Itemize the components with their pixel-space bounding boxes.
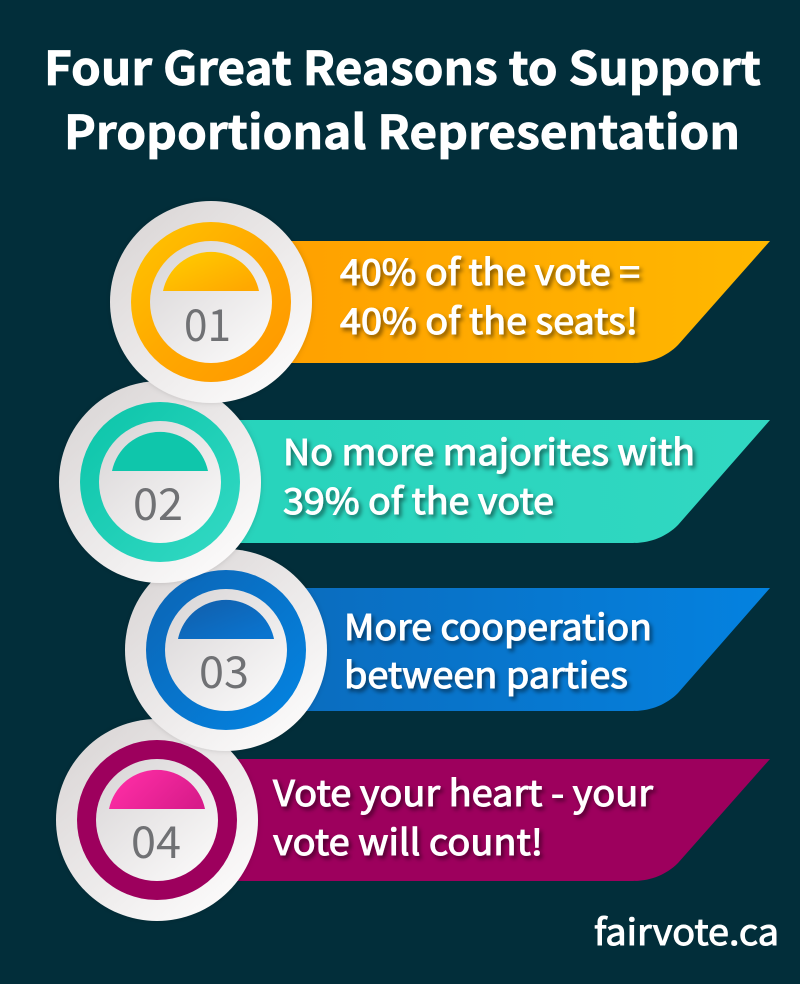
banner 2: teal: 39% of the vote — [283, 474, 554, 525]
banner 3: blue: between parties — [344, 648, 628, 699]
badge 03 — [125, 549, 327, 751]
website: fairvote.ca — [594, 905, 779, 956]
half disc 01 — [163, 252, 259, 291]
banner 4: magenta — [200, 759, 770, 881]
banner 3: blue — [260, 588, 770, 711]
banner 1: orange — [250, 241, 770, 363]
badge 04 — [56, 719, 258, 921]
banner 1: orange: 40% of the vote = — [340, 245, 640, 296]
banner 4: magenta: vote will count! — [273, 815, 543, 866]
title: Proportional Representation — [64, 96, 740, 163]
badge 02 — [59, 381, 261, 583]
banner 2: teal: No more majorites with — [283, 425, 695, 476]
banner 2: teal — [200, 420, 770, 543]
title — [44, 32, 761, 163]
half disc 03 — [178, 600, 274, 639]
number 02: 02 — [133, 469, 183, 533]
number 03: 03 — [199, 637, 249, 701]
banner 4: magenta: Vote your heart - your — [273, 766, 653, 817]
half disc 04 — [109, 770, 205, 809]
title: Four Great Reasons to Support — [44, 32, 761, 99]
half disc 02 — [112, 432, 208, 471]
number 01: 01 — [184, 290, 231, 354]
number 04: 04 — [131, 807, 181, 871]
badge 01 — [110, 201, 312, 403]
banner 3: blue: More cooperation — [344, 600, 652, 651]
banner 1: orange: 40% of the seats! — [340, 294, 638, 345]
